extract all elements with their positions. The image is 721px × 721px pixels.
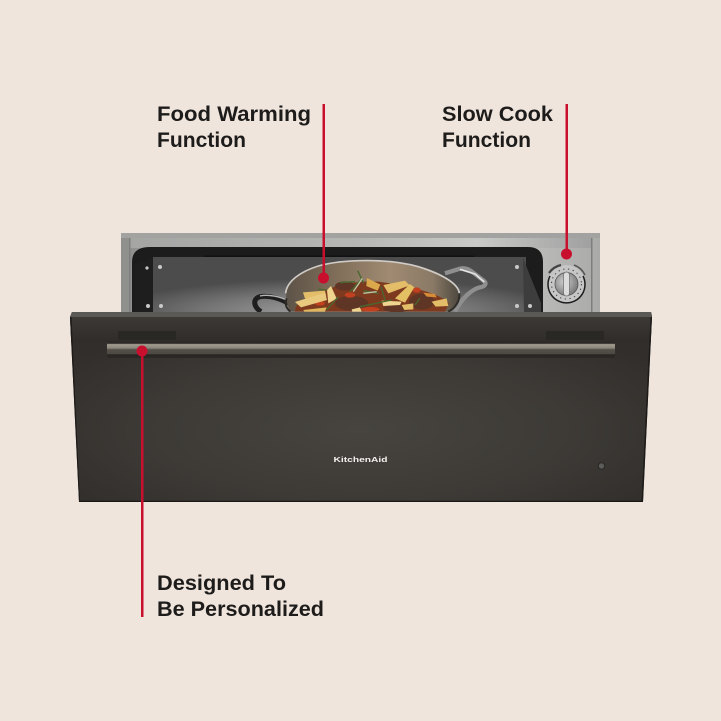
label: Function (157, 128, 246, 152)
callout: designed to be personalized (136, 346, 324, 621)
pointer line (136, 346, 148, 617)
appliance: warming drawer (70, 233, 652, 502)
indicator light (598, 463, 605, 469)
left pan handle (255, 296, 288, 312)
control knob (548, 265, 586, 303)
drawer handle (107, 341, 615, 358)
label: Function (442, 128, 531, 152)
callout: slow cook function (442, 102, 572, 260)
pan body (286, 260, 458, 312)
label: Food Warming (157, 102, 311, 126)
drawer front panel (70, 312, 652, 502)
label: Slow Cook (442, 102, 553, 126)
cooking pan with pasta (255, 260, 485, 312)
brand logo: KitchenAid (334, 455, 388, 464)
rosemary garnish (318, 271, 420, 310)
pointer line (318, 104, 329, 284)
pointer line (561, 104, 572, 260)
right pan handle (445, 268, 485, 312)
label: Be Personalized (157, 597, 324, 621)
sauce and meat (295, 281, 449, 312)
callout: food warming function (157, 102, 329, 284)
stainless steel frame (121, 233, 600, 313)
label: Designed To (157, 571, 286, 595)
drawer cavity (132, 247, 543, 313)
pasta (295, 278, 448, 312)
